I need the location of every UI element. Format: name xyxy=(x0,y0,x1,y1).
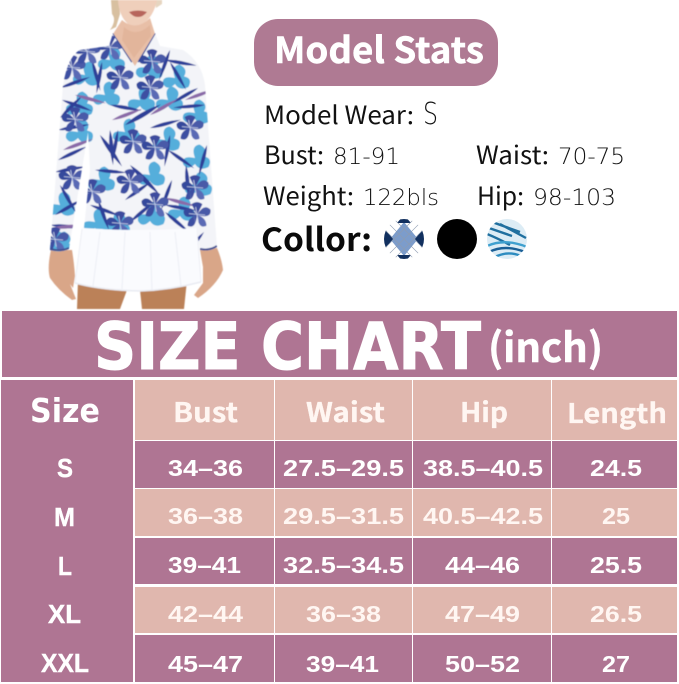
model stats text: 98-103 xyxy=(533,186,616,211)
row L: 25.5 xyxy=(590,552,642,578)
row XL: 42–44 xyxy=(168,601,243,627)
row M: 25 xyxy=(602,503,630,529)
model stats text: 81-91 xyxy=(333,145,400,170)
row L: 32.5–34.5 xyxy=(283,552,404,578)
row XL xyxy=(135,587,677,633)
row M: 40.5–42.5 xyxy=(423,503,543,529)
header row xyxy=(135,380,677,440)
size column: Size xyxy=(30,391,100,430)
size column xyxy=(1,380,133,682)
model stats text: Hip: xyxy=(477,177,524,213)
row S: 27.5–29.5 xyxy=(283,455,404,481)
icon: black swatch xyxy=(437,219,477,259)
row S: 24.5 xyxy=(590,455,642,481)
header row: Waist xyxy=(306,391,385,430)
model stats text: S xyxy=(423,97,438,132)
row S: 34–36 xyxy=(168,455,243,481)
size column: L xyxy=(58,551,72,581)
dark flowers xyxy=(58,55,86,80)
colour options: Collor: xyxy=(261,215,372,261)
header row: Bust xyxy=(173,391,238,430)
size column: S xyxy=(57,453,73,483)
row M xyxy=(135,489,677,536)
model stats text: Model Wear: xyxy=(264,96,414,132)
hands xyxy=(49,250,76,300)
size column: XL xyxy=(48,599,81,629)
pale blue petals xyxy=(73,62,100,86)
row XL: 26.5 xyxy=(590,601,642,627)
dark leaves xyxy=(50,49,209,258)
row XXL xyxy=(135,635,677,682)
row XXL: 45–47 xyxy=(168,651,243,677)
colour options xyxy=(262,219,527,259)
purple leaves xyxy=(52,87,216,230)
hair xyxy=(110,0,120,30)
row XL: 36–38 xyxy=(306,601,381,627)
row S xyxy=(135,441,677,488)
icon: argyle swatch xyxy=(384,219,424,259)
heading: model stats xyxy=(254,19,498,86)
heading: model stats: Model Stats xyxy=(274,22,484,74)
row XXL: 50–52 xyxy=(445,651,520,677)
row XXL: 27 xyxy=(602,651,630,677)
size chart table xyxy=(1,380,677,682)
title band: size chart: SIZE CHART xyxy=(94,310,481,385)
model stats text: 122bls xyxy=(363,186,439,211)
model stats text xyxy=(263,96,625,213)
row M: 36–38 xyxy=(168,503,243,529)
lips xyxy=(129,10,147,17)
legs xyxy=(77,280,127,309)
model stats text: Waist: xyxy=(476,136,549,172)
row XL: 47–49 xyxy=(445,601,520,627)
model stats text: 70-75 xyxy=(558,145,625,170)
size column: XXL xyxy=(41,648,89,678)
row XXL: 39–41 xyxy=(306,651,379,677)
model stats text: Bust: xyxy=(264,136,324,172)
header row: Length xyxy=(567,392,667,431)
row S: 38.5–40.5 xyxy=(423,455,543,481)
model photo xyxy=(40,0,225,309)
face and neck xyxy=(118,0,157,26)
skirt xyxy=(75,227,201,291)
header row: Hip xyxy=(460,391,508,430)
row L xyxy=(135,538,677,584)
title band: size chart xyxy=(2,310,677,385)
model stats text: Weight: xyxy=(263,177,354,213)
row L: 44–46 xyxy=(445,552,520,578)
title band: size chart: (inch) xyxy=(488,316,603,374)
row L: 39–41 xyxy=(168,552,241,578)
patterned shirt xyxy=(49,32,218,252)
icon: blue zebra swatch xyxy=(487,219,527,259)
size column: M xyxy=(54,502,75,532)
row M: 29.5–31.5 xyxy=(283,503,404,529)
